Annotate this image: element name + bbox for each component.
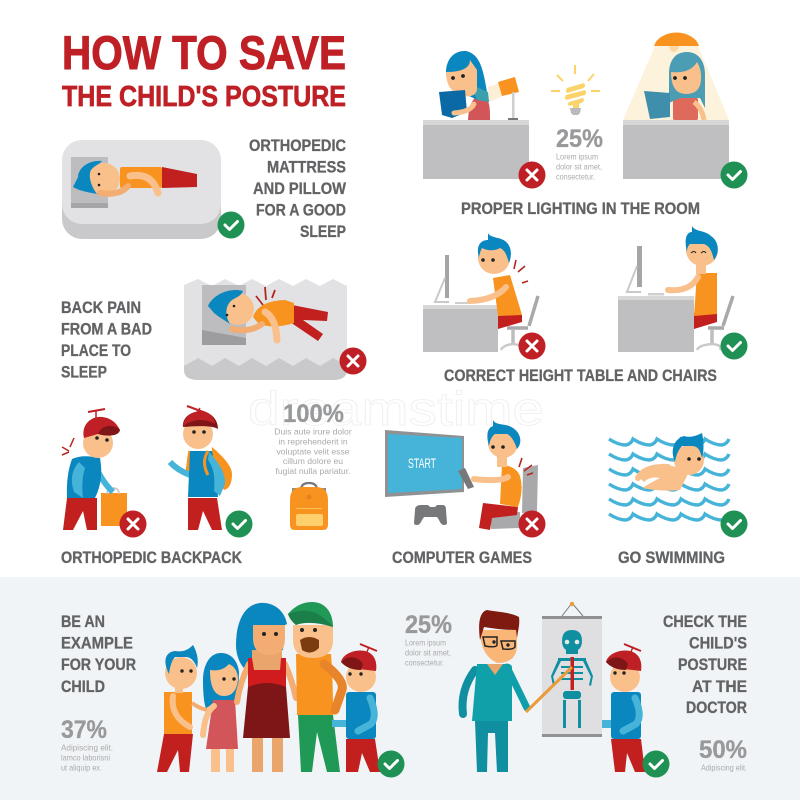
icon: light bulb [551, 65, 600, 115]
badge: check [378, 750, 404, 778]
scene: dim lighting [423, 51, 529, 179]
panel: orthopedic backpack [61, 400, 352, 567]
text block: POSTURE [678, 656, 747, 674]
stat: 100%: cillum dolore eu [283, 456, 343, 466]
figure: girl [203, 653, 239, 772]
badge: check [226, 510, 252, 538]
text block [663, 613, 747, 717]
badge: check [218, 212, 244, 238]
text block: MATTRESS [267, 158, 346, 176]
panel: back pain from bad place [61, 279, 366, 382]
scene: correct height [618, 226, 733, 352]
icon: gamepad [414, 505, 447, 525]
panel: go swimming [609, 433, 748, 567]
figure: left boy [157, 645, 208, 772]
heading: CORRECT HEIGHT TABLE AND CHAIRS [444, 367, 717, 385]
stat: 50%: Adipiscing elit. [701, 762, 747, 772]
icon: flat mattress [62, 140, 221, 239]
text block: BACK PAIN [61, 299, 141, 317]
scene: wrong height [423, 233, 538, 352]
icon: TV screen: START [408, 455, 436, 471]
panel: orthopedic mattress [62, 137, 346, 241]
stat: 25%: 25% [556, 125, 603, 153]
stat: 100%: in reprehenderit in [278, 436, 348, 446]
stat: 25%: Lorem ipsum [405, 638, 446, 648]
stat: 25% [556, 125, 603, 182]
stat: 25%: Lorem ipsum [556, 152, 598, 162]
figure: doctor [462, 610, 572, 772]
text block: SLEEP [300, 223, 346, 241]
icon: skeleton [551, 630, 593, 728]
text block: FOR A GOOD [256, 202, 346, 220]
stat: 37%: 37% [61, 716, 107, 744]
figure: bad bag carry [62, 409, 127, 530]
figure: swimmer [638, 433, 704, 491]
stat: 25%: consectetur. [556, 172, 595, 182]
stat: 100%: fugiat nulla pariatur. [275, 466, 351, 476]
text block: ORTHOPEDIC [249, 137, 346, 155]
icon: waves [609, 439, 729, 520]
text block: AT THE [692, 678, 747, 696]
figure: father [288, 602, 342, 772]
stat: 25%: consectetur. [405, 658, 444, 668]
title [62, 26, 346, 113]
stat: 37%: lamco laborisni [61, 752, 110, 762]
badge: check [642, 750, 670, 778]
heading: GO SWIMMING [618, 549, 725, 567]
text block: CHILD [61, 678, 105, 696]
badge: cross [518, 510, 546, 538]
badge: check [720, 162, 748, 188]
panel: computer games [385, 420, 546, 567]
badge: check [720, 332, 748, 360]
stat: 100%: Duis aute irure dolor [274, 426, 352, 436]
text block: BE AN [61, 613, 105, 631]
stat: 25%: dolor sit amet, [556, 162, 602, 172]
text block [61, 613, 136, 696]
heading: ORTHOPEDIC BACKPACK [61, 549, 242, 567]
poster: skeleton chart [542, 602, 602, 737]
text block: CHECK THE [663, 613, 747, 631]
stat: 25%: 25% [405, 611, 452, 639]
badge: cross [120, 510, 146, 538]
bottom band background [0, 577, 800, 800]
text block [249, 137, 346, 241]
stat: 25% [405, 611, 452, 668]
stat: 37%: Adipiscing elit. [61, 742, 113, 752]
panel: correct height table and chairs [423, 226, 748, 385]
badge: cross [518, 332, 546, 360]
figure: right boy [332, 644, 380, 772]
stat: 37%: ut aliquip ex. [61, 762, 102, 772]
icon: child sleeping twisted [208, 287, 328, 341]
text block: AND PILLOW [253, 180, 346, 198]
text block: FROM A BAD [61, 320, 152, 338]
text block: EXAMPLE [61, 634, 133, 652]
icon: child sleeping straight [73, 161, 197, 195]
title: THE CHILD'S POSTURE [62, 81, 346, 113]
badge: cross [340, 348, 366, 374]
badge: cross [518, 162, 546, 188]
text block: FOR YOUR [61, 656, 136, 674]
figure: boy patient [602, 644, 645, 772]
text block: DOCTOR [686, 699, 747, 717]
watermark: dreamstime [248, 382, 544, 435]
stat: 100%: 100% [283, 400, 344, 428]
heading: COMPUTER GAMES [392, 549, 532, 567]
text block: CHILD'S [689, 634, 747, 652]
stat: 100% [274, 400, 352, 476]
text block: PLACE TO [61, 342, 131, 360]
title: HOW TO SAVE [62, 26, 346, 79]
text block: SLEEP [61, 364, 107, 382]
figure: boy gaming [458, 420, 538, 530]
scene: good lighting [623, 33, 729, 179]
panel: proper lighting [423, 33, 748, 218]
badge: check [720, 510, 748, 538]
stat: 37% [61, 716, 113, 772]
stat: 100%: voluptate velit esse [276, 446, 350, 456]
stat: 50%: 50% [699, 736, 747, 764]
icon: uneven mattress [184, 279, 347, 380]
text block [61, 299, 152, 382]
figure: good backpack [170, 406, 232, 530]
panel: be an example [61, 602, 404, 778]
panel: check at the doctor [405, 602, 747, 778]
figure: mother [236, 603, 296, 772]
stat: 25%: dolor sit amet, [405, 648, 451, 658]
icon: backpack [290, 483, 328, 530]
heading: PROPER LIGHTING IN THE ROOM [461, 200, 700, 218]
icon: TV screen [385, 430, 464, 497]
